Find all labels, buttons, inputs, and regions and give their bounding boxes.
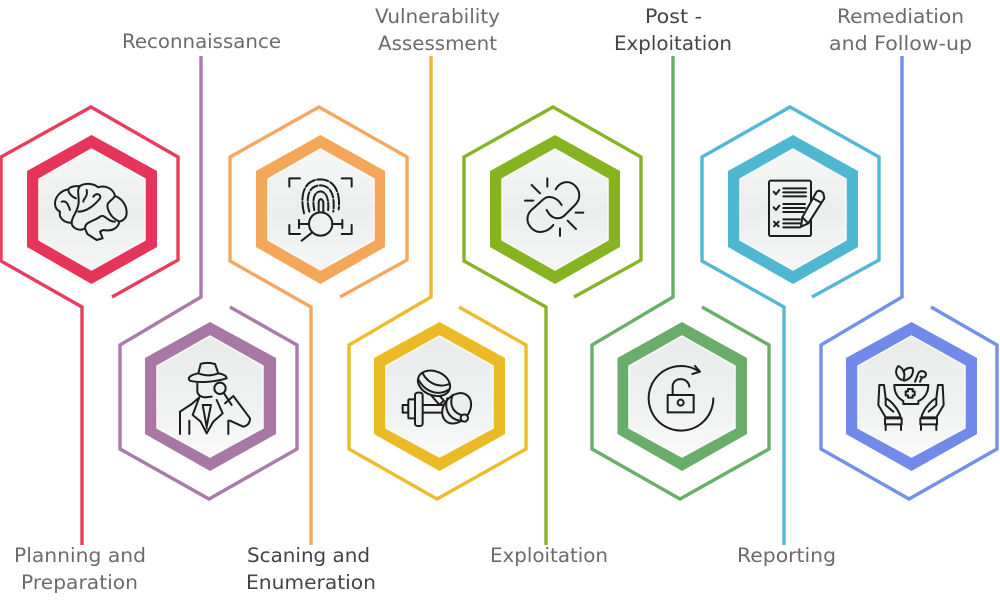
outline with connector	[1, 107, 178, 545]
label: reporting: Reporting	[737, 544, 836, 567]
icon: dumbbells	[403, 366, 477, 429]
label: vulnerability assessment: Vulnerability	[375, 5, 500, 28]
step 1: planning and preparation hexagon	[1, 107, 178, 545]
outline with connector	[821, 56, 997, 499]
icon: broken chain link	[525, 178, 583, 236]
inner hexagon	[846, 322, 977, 471]
label: post-exploitation: Exploitation	[614, 32, 732, 55]
step 6: post-exploitation hexagon	[592, 56, 769, 499]
label: remediation and follow-up: and Follow-up	[829, 32, 972, 55]
label: planning and preparation: Preparation	[21, 571, 138, 594]
icon: brain	[55, 184, 127, 240]
icon: checklist and pencil	[769, 181, 824, 236]
step 4: vulnerability assessment hexagon	[349, 56, 526, 499]
label: exploitation: Exploitation	[490, 544, 608, 567]
step 3: scanning and enumeration hexagon	[230, 107, 407, 545]
icon: detective	[180, 363, 250, 434]
outline with connector	[464, 107, 641, 545]
outline with connector	[349, 56, 526, 499]
step 7: reporting hexagon	[702, 107, 879, 545]
inner hexagon	[490, 135, 620, 284]
outline with connector	[702, 107, 879, 545]
label: post-exploitation: Post -	[645, 5, 702, 28]
label: remediation and follow-up: Remediation	[837, 5, 964, 28]
step 2: reconnaissance hexagon	[120, 56, 297, 499]
label: scaning and enumeration: Scaning and	[247, 544, 370, 567]
label: vulnerability assessment: Assessment	[378, 32, 497, 55]
step 5: exploitation hexagon	[464, 107, 641, 545]
label: scaning and enumeration: Enumeration	[246, 571, 376, 594]
outline with connector	[230, 107, 407, 545]
icon: herbal bowl in hands	[878, 366, 944, 430]
icon: fingerprint scan	[289, 178, 352, 241]
label: reconnaissance: Reconnaissance	[122, 30, 281, 53]
step 8: remediation and follow-up hexagon	[821, 56, 997, 499]
inner hexagon	[618, 322, 747, 471]
icon: unlock with rotation arrow	[649, 366, 713, 431]
outline with connector	[592, 56, 769, 499]
label: planning and preparation: Planning and	[14, 544, 146, 567]
inner hexagon	[27, 135, 157, 284]
inner hexagon	[374, 322, 505, 471]
inner hexagon	[145, 322, 276, 471]
inner hexagon	[728, 135, 858, 284]
inner hexagon	[256, 135, 385, 284]
outline with connector	[120, 56, 297, 499]
